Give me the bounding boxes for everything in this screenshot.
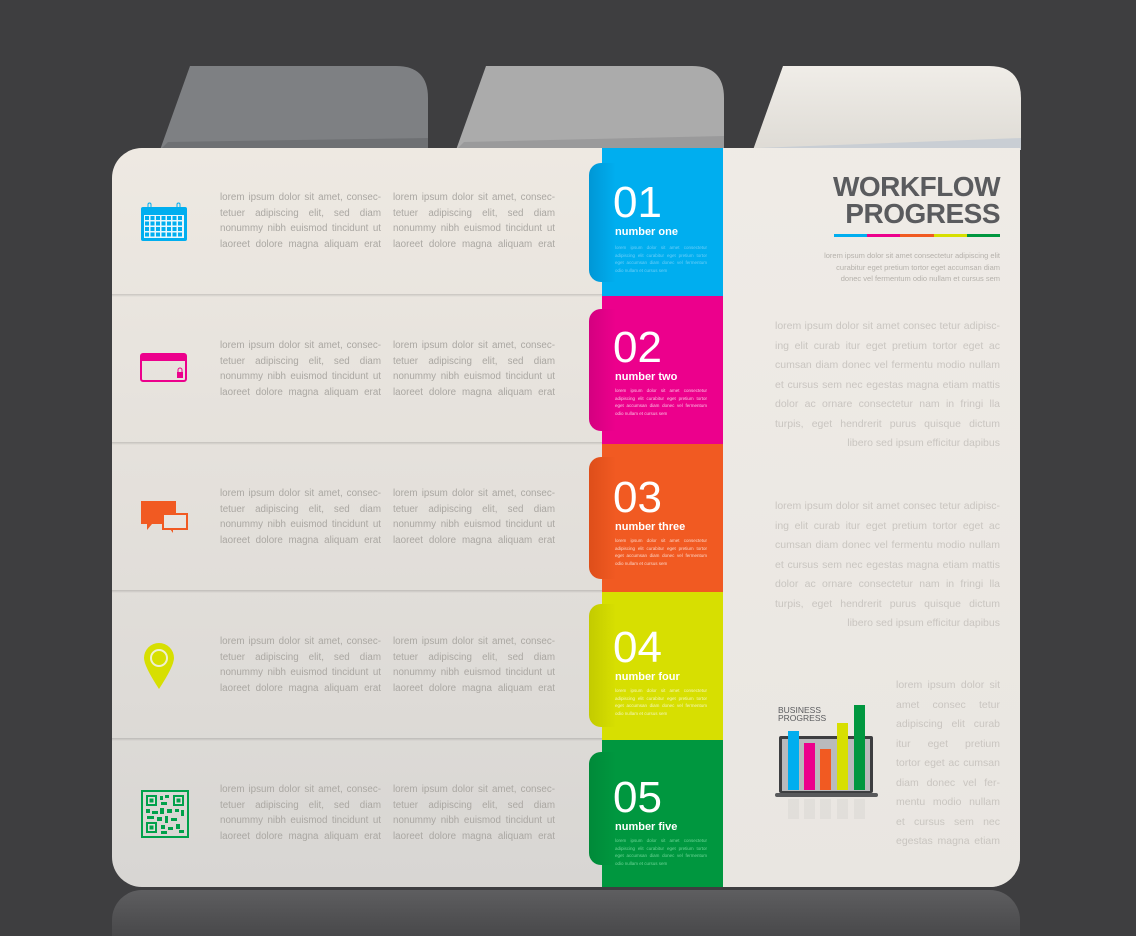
paragraph 2: [775, 500, 1000, 629]
text: number two: [615, 371, 677, 383]
row 1: [141, 192, 555, 250]
text columns: tetuer adipiscing elit, sed diam: [393, 800, 555, 811]
text: number five: [615, 821, 677, 833]
paragraph 1: cumsan diam donec vel fermentu modio nullam: [775, 359, 1000, 371]
tab 04: [589, 592, 723, 740]
text columns: nonummy nibh euismod tincidunt ut: [393, 371, 555, 382]
subtitle text: donec vel fermentum odio nullam et cursus sem: [841, 274, 1000, 283]
title: PROGRESS: [845, 198, 1000, 229]
text columns: nonummy nibh euismod tincidunt ut: [220, 519, 381, 530]
paragraph 2: turpis, eget hendrerit purus quisque dictum: [775, 598, 1000, 610]
paragraph 1: turpis, eget hendrerit purus quisque dictum: [775, 418, 1000, 430]
paragraph 3: et cursus sem nec: [896, 816, 1000, 828]
folder tab 3: [754, 66, 1021, 150]
text columns: nonummy nibh euismod tincidunt ut: [393, 223, 555, 234]
text columns: tetuer adipiscing elit, sed diam: [393, 652, 555, 663]
text: 01: [613, 178, 662, 227]
paragraph 2: cumsan diam donec vel fermentu modio nullam: [775, 539, 1000, 551]
tab 05: [589, 740, 723, 887]
text columns: laoreet dolore magna aliquam erat: [393, 387, 555, 398]
icon: calendar: [141, 202, 187, 241]
text columns: lorem ipsum dolor sit amet, consec-: [393, 784, 555, 795]
text columns: tetuer adipiscing elit, sed diam: [393, 356, 555, 367]
tab 03: [589, 444, 723, 592]
text columns: [220, 340, 555, 398]
folder tab 2: [456, 66, 724, 148]
text columns: [220, 192, 555, 250]
paragraph 2: lorem ipsum dolor sit amet consec tetur adipisc-: [775, 500, 1000, 512]
paragraph 2: libero sed ipsum efficitur dapibus: [847, 617, 1000, 629]
paragraph 2: ing elit curab itur eget pretium tortor eget ac: [775, 520, 1000, 532]
text: 04: [613, 623, 662, 672]
text: number four: [615, 671, 680, 683]
text columns: laoreet dolore magna aliquam erat: [393, 239, 555, 250]
text: number three: [615, 521, 685, 533]
text columns: lorem ipsum dolor sit amet, consec-: [220, 636, 381, 647]
paragraph 3: diam donec vel fer-: [896, 776, 1000, 788]
subtitle text: [824, 251, 1000, 283]
text columns: nonummy nibh euismod tincidunt ut: [393, 519, 555, 530]
paragraph 2: et cursus sem nec egestas magna etiam mattis: [775, 558, 1000, 570]
text columns: lorem ipsum dolor sit amet, consec-: [393, 340, 555, 351]
text columns: [220, 636, 555, 694]
icon: map pin: [144, 643, 174, 689]
paragraph 1: libero sed ipsum efficitur dapibus: [847, 437, 1000, 449]
text columns: laoreet dolore magna aliquam erat: [220, 831, 381, 842]
text columns: nonummy nibh euismod tincidunt ut: [220, 371, 381, 382]
tab 02: [589, 296, 723, 444]
text: lorem ipsum dolor sit amet consectetur adipiscing elit curabitur eget pretium tortor eget accumsan diam donec vel fermentum odio nullam et cursus sem: [615, 838, 707, 866]
text: 03: [613, 473, 662, 522]
tab 01: [589, 148, 723, 296]
text columns: tetuer adipiscing elit, sed diam: [220, 356, 381, 367]
icon: chat: [141, 501, 188, 533]
text columns: nonummy nibh euismod tincidunt ut: [220, 223, 381, 234]
text: lorem ipsum dolor sit amet consectetur adipiscing elit curabitur eget pretium tortor eget accumsan diam donec vel fermentum odio nullam et cursus sem: [615, 538, 707, 566]
row 2: [140, 340, 555, 398]
text columns: lorem ipsum dolor sit amet, consec-: [393, 192, 555, 203]
paragraph 1: ing elit curab itur eget pretium tortor eget ac: [775, 340, 1000, 352]
color bar: [834, 234, 1000, 237]
paragraph 3: tortor eget ac cumsan: [896, 757, 1000, 769]
row 5: [141, 784, 555, 842]
paragraph 1: et cursus sem nec egestas magna etiam mattis: [775, 378, 1000, 390]
text columns: tetuer adipiscing elit, sed diam: [220, 800, 381, 811]
text: lorem ipsum dolor sit amet consectetur adipiscing elit curabitur eget pretium tortor eget accumsan diam donec vel fermentum odio nullam et cursus sem: [615, 245, 707, 272]
icon: card: [140, 353, 187, 382]
paragraph 1: [775, 320, 1000, 449]
text columns: laoreet dolore magna aliquam erat: [220, 683, 381, 694]
text columns: nonummy nibh euismod tincidunt ut: [220, 667, 381, 678]
paragraph 3: lorem ipsum dolor sit: [896, 679, 1000, 691]
text columns: tetuer adipiscing elit, sed diam: [393, 208, 555, 219]
paragraph 3: itur eget pretium: [896, 738, 1000, 750]
row 3: [141, 488, 555, 546]
text columns: [220, 784, 555, 842]
text columns: nonummy nibh euismod tincidunt ut: [393, 815, 555, 826]
text columns: nonummy nibh euismod tincidunt ut: [220, 815, 381, 826]
text columns: laoreet dolore magna aliquam erat: [393, 535, 555, 546]
text columns: lorem ipsum dolor sit amet, consec-: [220, 488, 381, 499]
paragraph 3: [896, 679, 1000, 847]
paragraph 3: mentu modio nullam: [896, 796, 1000, 808]
folder tab 1: [160, 66, 428, 148]
paragraph 1: lorem ipsum dolor sit amet consec tetur adipisc-: [775, 320, 1000, 332]
text columns: lorem ipsum dolor sit amet, consec-: [220, 192, 381, 203]
icon: QR code: [141, 790, 189, 838]
text columns: tetuer adipiscing elit, sed diam: [220, 208, 381, 219]
paragraph 1: dolor ac ornare consectetur nam in fringi lla: [775, 398, 1000, 410]
text: 05: [613, 773, 662, 822]
text: number one: [615, 226, 678, 238]
text columns: tetuer adipiscing elit, sed diam: [220, 504, 381, 515]
text columns: tetuer adipiscing elit, sed diam: [393, 504, 555, 515]
text columns: nonummy nibh euismod tincidunt ut: [393, 667, 555, 678]
subtitle text: curabitur eget pretium tortor eget accumsan diam: [836, 262, 1000, 272]
chart: business progress laptop: PROGRESS: [778, 713, 827, 723]
text columns: lorem ipsum dolor sit amet, consec-: [393, 488, 555, 499]
text columns: lorem ipsum dolor sit amet, consec-: [393, 636, 555, 647]
text: 02: [613, 323, 662, 372]
chart: business progress laptop: BUSINESS: [778, 705, 821, 715]
bottom reflection: [112, 890, 1020, 936]
title: [833, 171, 1000, 229]
title: WORKFLOW: [833, 171, 1000, 202]
chart: business progress laptop: [775, 705, 878, 819]
text columns: laoreet dolore magna aliquam erat: [220, 387, 381, 398]
text: lorem ipsum dolor sit amet consectetur adipiscing elit curabitur eget pretium tortor eget accumsan diam donec vel fermentum odio nullam et cursus sem: [615, 388, 707, 416]
text columns: tetuer adipiscing elit, sed diam: [220, 652, 381, 663]
row 4: [144, 636, 555, 694]
paragraph 3: adipiscing elit curab: [896, 718, 1000, 730]
text columns: laoreet dolore magna aliquam erat: [393, 831, 555, 842]
subtitle text: lorem ipsum dolor sit amet consectetur adipiscing elit: [824, 251, 1000, 260]
text columns: laoreet dolore magna aliquam erat: [220, 535, 381, 546]
paragraph 3: amet consec tetur: [896, 698, 1000, 710]
text columns: laoreet dolore magna aliquam erat: [220, 239, 381, 250]
text columns: lorem ipsum dolor sit amet, consec-: [220, 784, 381, 795]
text columns: lorem ipsum dolor sit amet, consec-: [220, 340, 381, 351]
text columns: [220, 488, 555, 546]
text: lorem ipsum dolor sit amet consectetur adipiscing elit curabitur eget pretium tortor eget accumsan diam donec vel fermentum odio nullam et cursus sem: [615, 688, 707, 716]
paragraph 3: egestas magna etiam: [896, 835, 1000, 847]
paragraph 2: dolor ac ornare consectetur nam in fringi lla: [775, 578, 1000, 590]
text columns: laoreet dolore magna aliquam erat: [393, 683, 555, 694]
main card: [112, 148, 1020, 887]
